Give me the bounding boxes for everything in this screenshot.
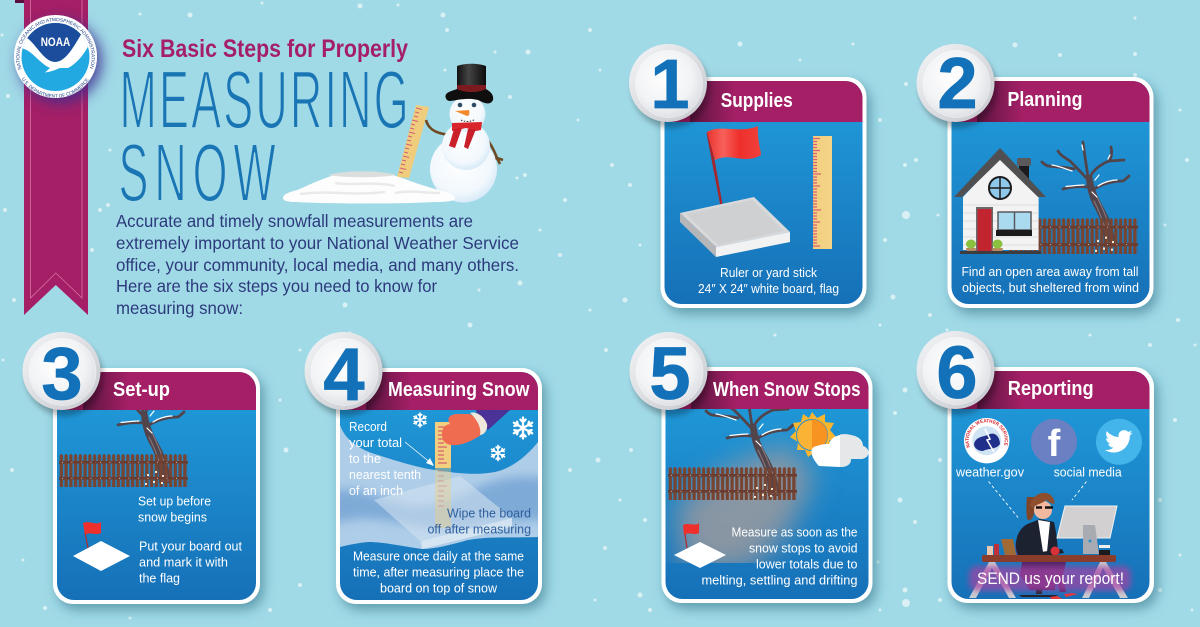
caption (702, 524, 858, 588)
caption: lower totals due to (756, 556, 858, 572)
labels: weather.gov (955, 464, 1024, 480)
icon: cloud (811, 434, 868, 467)
captions (138, 494, 242, 586)
number 6 badge: 6 (936, 331, 978, 414)
intro paragraph (116, 211, 519, 318)
panel: step 6 reporting (916, 331, 1166, 616)
number 2 badge (916, 44, 998, 128)
caption (962, 264, 1139, 295)
title: snow: SNOW (118, 128, 282, 220)
callout: record your total: to the (349, 451, 381, 466)
heading: Set-up (113, 379, 170, 401)
callout: record your total: nearest tenth (349, 467, 421, 482)
icon: snowflakes (414, 413, 532, 460)
intro paragraph: Here are the six steps you need to know for (116, 276, 437, 296)
NOAA logo: NATIONAL OCEANIC AND ATMOSPHERIC ADMINISTRATION (16, 18, 95, 70)
number 3 badge: 3 (41, 332, 83, 415)
caption: Ruler or yard stick (720, 265, 817, 280)
number 1 badge: 1 (651, 45, 689, 123)
captions: Put your board out (139, 538, 242, 554)
icon: flag on white board (680, 126, 790, 257)
panel: step 3 set-up (22, 332, 260, 604)
panel: step 4 measuring snow (304, 332, 545, 604)
arrow (405, 442, 434, 466)
NOAA logo (8, 12, 112, 111)
captions: the flag (139, 570, 180, 586)
dashed lines (988, 482, 1086, 518)
caption: 24″ X 24″ white board, flag (698, 281, 839, 296)
icon: board and flag (674, 523, 726, 568)
heading: Planning (1008, 89, 1082, 111)
send pill glow (969, 566, 1131, 591)
icon: National Weather Service logo: NATIONAL WEATHER SERVICE (965, 419, 1008, 448)
panel: step 5 when snow stops (630, 332, 872, 603)
callout: record your total (349, 419, 421, 498)
icon: twitter (1096, 419, 1142, 465)
icon: facebook (1031, 419, 1077, 465)
callout: record your total: your total (349, 435, 402, 450)
caption: snow stops to avoid (749, 540, 858, 556)
caption: objects, but sheltered from wind (962, 280, 1139, 295)
intro paragraph: Accurate and timely snowfall measurements are (116, 211, 473, 231)
intro paragraph: extremely important to your National Weather Service (116, 233, 519, 253)
callout: wipe the board: Wipe the board (447, 506, 531, 520)
caption: Measure as soon as the (732, 524, 858, 540)
caption: melting, settling and drifting (702, 572, 858, 588)
icon: National Weather Service logo (964, 418, 1010, 464)
caption: board on top of snow (380, 580, 498, 596)
number 6 badge (916, 331, 998, 415)
icon: ruler (813, 136, 832, 249)
panel: step 1 supplies (629, 44, 866, 308)
caption: Find an open area away from tall (962, 264, 1139, 279)
heading: Measuring Snow (388, 379, 530, 401)
icon: board and flag (73, 522, 130, 571)
number 2 badge: 2 (937, 44, 978, 124)
captions: snow begins (138, 510, 207, 524)
callout: record your total: Record (349, 419, 387, 434)
icon: house (954, 148, 1046, 254)
captions: and mark it with (139, 554, 228, 570)
heading: Reporting (1008, 378, 1094, 400)
labels: social media (1054, 464, 1122, 480)
NOAA logo: NOAA (41, 35, 70, 49)
icon: tree and fence (1009, 142, 1138, 254)
ruler (435, 422, 451, 528)
number 5 badge (630, 332, 710, 416)
labels (955, 464, 1122, 480)
icon: facebook: f (1048, 423, 1061, 465)
NOAA logo: U.S. DEPARTMENT OF COMMERCE (22, 77, 89, 98)
captions: Set up before (138, 494, 211, 508)
number 4 badge: 4 (323, 333, 365, 416)
intro paragraph: measuring snow: (116, 298, 243, 318)
number 1 badge (629, 44, 710, 128)
snowman with ruler and snow pile (283, 64, 503, 204)
callout: wipe the board (428, 506, 531, 536)
caption (698, 265, 839, 296)
illustration: woman at desk (969, 493, 1128, 600)
heading: When Snow Stops (713, 379, 860, 401)
heading: Supplies (721, 90, 793, 112)
caption (353, 548, 524, 596)
icon: mitten and sleeve (442, 410, 510, 445)
icon: sun (790, 412, 836, 457)
panel: step 2 planning (916, 44, 1154, 308)
caption: Measure once daily at the same (353, 548, 524, 564)
ribbon (15, 0, 88, 315)
title: measuring: MEASURING (120, 55, 411, 147)
callout: wipe the board: off after measuring (428, 522, 531, 536)
subtitle: Six Basic Steps for Properly (122, 35, 408, 63)
snow drift (340, 425, 538, 549)
number 5 badge: 5 (649, 332, 691, 415)
caption: time, after measuring place the (353, 564, 524, 580)
call to action: SEND us your report! (977, 569, 1124, 588)
callout: record your total: of an inch (349, 483, 403, 498)
number 3 badge (22, 332, 104, 416)
number 4 badge (304, 332, 386, 416)
intro paragraph: office, your community, local media, and many others. (116, 255, 519, 275)
